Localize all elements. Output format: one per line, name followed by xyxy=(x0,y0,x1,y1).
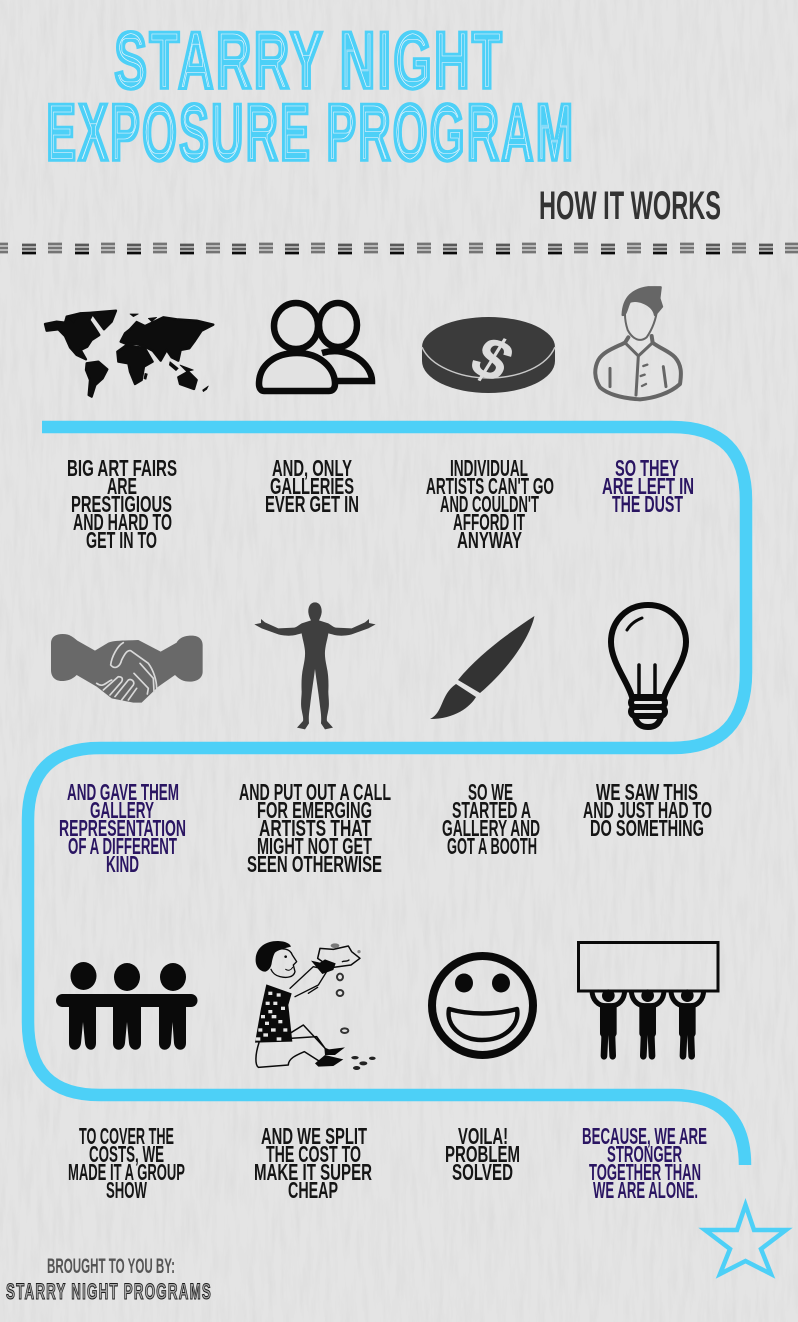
title xyxy=(46,16,575,178)
text: split the cost: MAKE IT SUPER xyxy=(254,1159,372,1185)
text: only galleries: GALLERIES xyxy=(270,473,354,499)
text: we saw this xyxy=(583,779,712,841)
text: gallery representation xyxy=(59,779,186,877)
text: left in the dust: THE DUST xyxy=(612,491,683,517)
text: only galleries: AND, ONLY xyxy=(272,455,352,481)
text: individual artists: AFFORD IT xyxy=(453,509,525,535)
text: left in the dust: ARE LEFT IN xyxy=(602,473,694,499)
icon: three people holding xyxy=(56,962,198,1050)
footer brand: STARRY NIGHT PROGRAMS xyxy=(6,1279,212,1304)
text: individual artists: ARTISTS CAN'T GO xyxy=(426,473,554,499)
text: group show: MADE IT A GROUP xyxy=(68,1159,185,1185)
text: split the cost: CHEAP xyxy=(288,1177,338,1203)
text: stronger together: STRONGER xyxy=(607,1141,682,1167)
text: big art fairs: ARE xyxy=(107,473,137,499)
text: stronger together xyxy=(582,1123,707,1203)
text: only galleries: EVER GET IN xyxy=(265,491,359,517)
icon: boy with piggy bank xyxy=(255,941,376,1070)
text: big art fairs xyxy=(67,455,177,553)
text: big art fairs: BIG ART FAIRS xyxy=(67,455,177,481)
icon: smiley face xyxy=(432,956,533,1055)
text: call for emerging artists: ARTISTS THAT xyxy=(259,815,371,841)
text: voila: SOLVED xyxy=(452,1159,513,1185)
icon: two people xyxy=(259,303,372,391)
text: big art fairs: GET IN TO xyxy=(86,527,157,553)
text: split the cost: THE COST TO xyxy=(266,1141,361,1167)
text: started a gallery: GOT A BOOTH xyxy=(447,833,537,859)
text: we saw this: AND JUST HAD TO xyxy=(583,797,712,823)
text: stronger together: TOGETHER THAN xyxy=(589,1159,701,1185)
icon: people lifting blank sign xyxy=(578,942,718,1060)
text: voila xyxy=(445,1123,520,1185)
icon: sketched man xyxy=(595,287,681,399)
text: started a gallery: STARTED A xyxy=(452,797,531,823)
text: left in the dust: SO THEY xyxy=(615,455,679,481)
text: started a gallery: SO WE xyxy=(468,779,513,805)
icon: handshake xyxy=(51,634,203,703)
text: started a gallery xyxy=(442,779,540,859)
text: split the cost xyxy=(254,1123,372,1203)
text: started a gallery: GALLERY AND xyxy=(442,815,540,841)
text: split the cost: AND WE SPLIT xyxy=(261,1123,367,1149)
text: only galleries xyxy=(265,455,359,517)
text: call for emerging artists: MIGHT NOT GET xyxy=(257,833,372,859)
icon: dollar coin xyxy=(422,317,555,395)
text: gallery representation: AND GAVE THEM xyxy=(67,779,179,805)
text: voila: PROBLEM xyxy=(445,1141,520,1167)
text: stronger together: WE ARE ALONE. xyxy=(593,1177,698,1203)
text: gallery representation: GALLERY xyxy=(90,797,154,823)
winding path xyxy=(28,427,746,1165)
footer credit: BROUGHT TO YOU BY: xyxy=(47,1255,175,1278)
icon: paintbrush xyxy=(430,616,534,719)
icon: standing figure xyxy=(254,602,376,729)
star icon xyxy=(705,1205,786,1274)
text: individual artists: AND COULDN'T xyxy=(440,491,539,517)
text: we saw this: DO SOMETHING xyxy=(590,815,704,841)
text: gallery representation: KIND xyxy=(106,851,139,877)
text: voila: VOILA! xyxy=(458,1123,508,1149)
icon: dollar coin: $ xyxy=(459,323,526,395)
text: gallery representation: REPRESENTATION xyxy=(59,815,186,841)
text: big art fairs: AND HARD TO xyxy=(73,509,172,535)
title: STARRY NIGHT xyxy=(114,16,504,106)
text: call for emerging artists: SEEN OTHERWISE xyxy=(247,851,382,877)
text: group show: TO COVER THE xyxy=(79,1123,174,1149)
text: big art fairs: PRESTIGIOUS xyxy=(71,491,172,517)
text: group show: SHOW xyxy=(106,1177,147,1203)
icon: world map xyxy=(45,311,213,397)
text: call for emerging artists: AND PUT OUT A CALL xyxy=(239,779,391,805)
text: call for emerging artists xyxy=(239,779,391,877)
text: group show xyxy=(68,1123,185,1203)
text: gallery representation: OF A DIFFERENT xyxy=(68,833,177,859)
icon: light bulb xyxy=(611,605,686,727)
text: left in the dust xyxy=(602,455,694,517)
text: individual artists: ANYWAY xyxy=(457,527,522,553)
text: individual artists: INDIVIDUAL xyxy=(450,455,528,481)
text: group show: COSTS, WE xyxy=(89,1141,164,1167)
text: call for emerging artists: FOR EMERGING xyxy=(257,797,372,823)
text: we saw this: WE SAW THIS xyxy=(596,779,698,805)
text: stronger together: BECAUSE, WE ARE xyxy=(582,1123,707,1149)
text: individual artists xyxy=(426,455,554,553)
